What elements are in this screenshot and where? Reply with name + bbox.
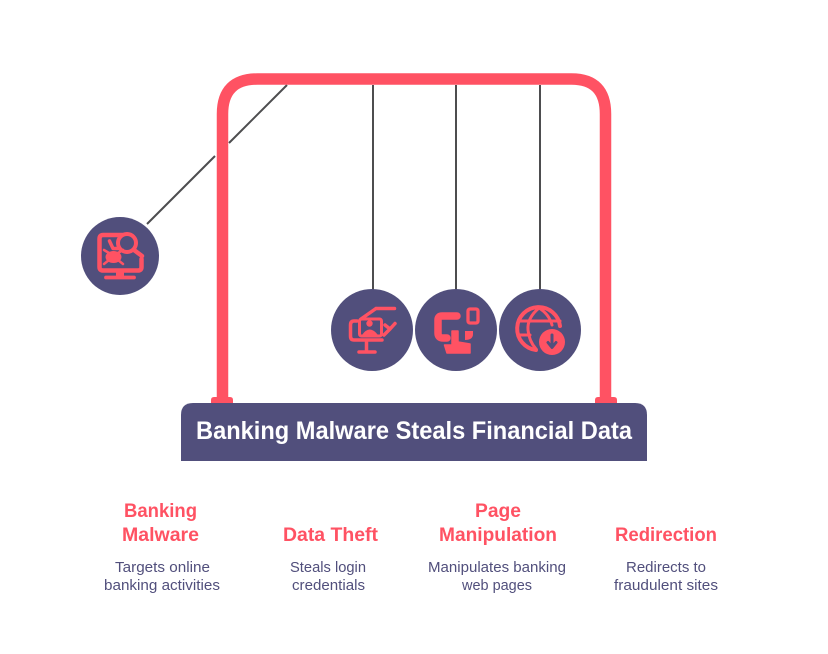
- description: Data Theft: credentials: [292, 578, 365, 594]
- ball: page manipulation: [415, 289, 497, 371]
- title banner: [181, 403, 647, 461]
- description: Redirection: Redirects to: [626, 560, 706, 576]
- icon: devices with touching hand: [438, 309, 478, 353]
- icon: monitor with photo and card: [350, 308, 395, 352]
- column: Page Manipulation: [428, 501, 566, 594]
- description: Redirection: fraudulent sites: [614, 578, 718, 594]
- icon: monitor with bug and magnifier: [100, 234, 142, 278]
- heading: Banking Malware: Banking: [124, 501, 197, 522]
- heading: Banking Malware: Malware: [122, 525, 199, 546]
- swinging ball: banking malware: [81, 217, 159, 295]
- ball: data theft: [331, 289, 413, 371]
- ball: redirection: [499, 289, 581, 371]
- description: Data Theft: Steals login: [290, 560, 366, 576]
- heading: Redirection: Redirection: [615, 525, 717, 546]
- description: Page Manipulation: web pages: [461, 578, 532, 594]
- column: Data Theft: [283, 525, 379, 594]
- pendulum strings: [147, 85, 540, 290]
- column: Redirection: [614, 525, 718, 594]
- icon: globe with download badge: [517, 307, 565, 355]
- cradle frame: [211, 79, 617, 403]
- description: Banking Malware: Targets online: [115, 560, 210, 576]
- description: Page Manipulation: Manipulates banking: [428, 560, 566, 576]
- heading: Page Manipulation: Manipulation: [439, 525, 557, 546]
- heading: Data Theft: Data Theft: [283, 525, 379, 546]
- column: Banking Malware: [104, 501, 220, 594]
- heading: Page Manipulation: Page: [475, 501, 521, 522]
- description: Banking Malware: banking activities: [104, 578, 220, 594]
- title banner: Banking Malware Steals Financial Data: [196, 417, 633, 445]
